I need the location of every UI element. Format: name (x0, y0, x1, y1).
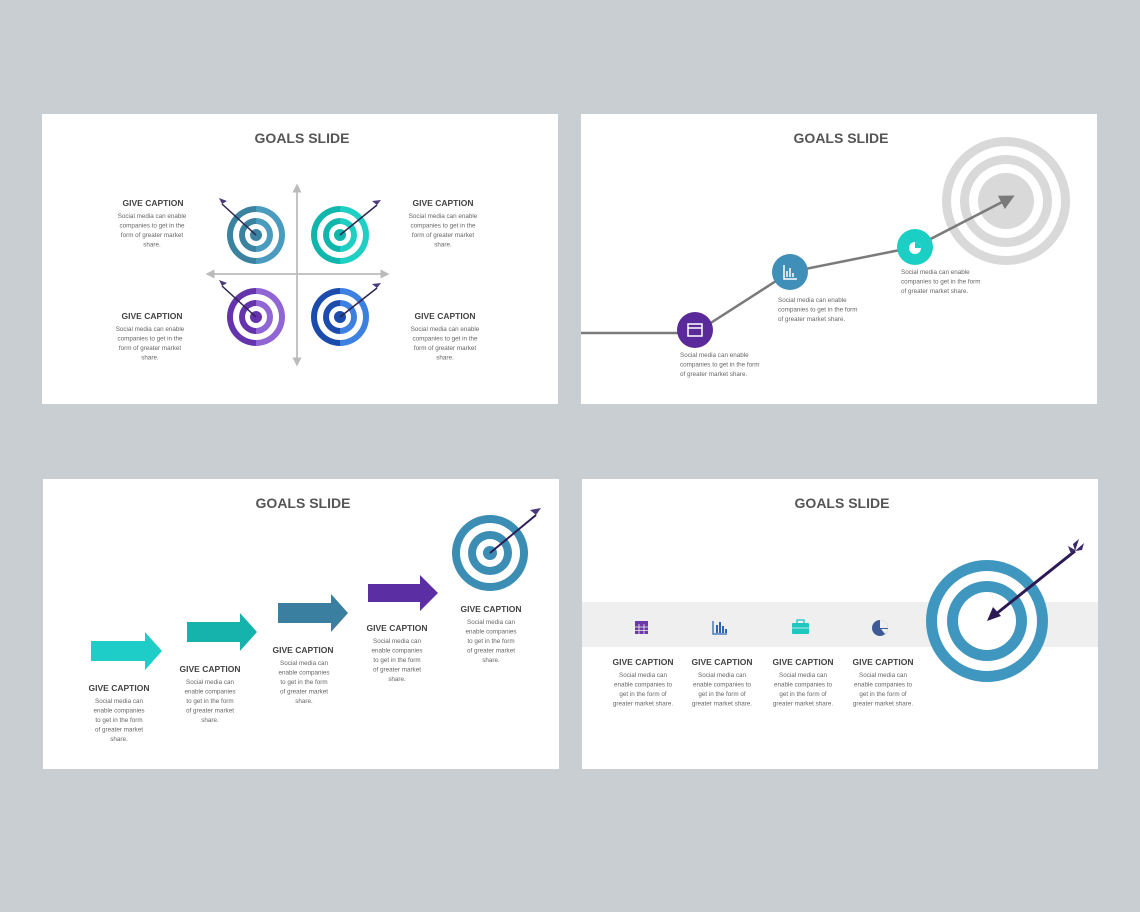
caption: top-right: companies to get in the (410, 222, 476, 230)
caption: top-left: companies to get in the (119, 222, 185, 230)
target: bottom-left (219, 280, 285, 346)
caption 2: to get in the form (186, 698, 234, 705)
icon: calendar circle (677, 312, 713, 348)
text: step 2: of greater market share. (778, 316, 845, 323)
caption 3: enable companies (278, 670, 330, 676)
caption 1: greater market share. (613, 700, 673, 708)
icon: pie circle (897, 229, 933, 265)
caption: top-left: Social media can enable (118, 213, 187, 220)
caption: bottom-left (116, 311, 185, 362)
caption: top-left: GIVE CAPTION (123, 198, 183, 208)
caption: top-right: form of greater market (412, 232, 474, 239)
arrow 3 (278, 594, 348, 632)
caption: bottom-right: companies to get in the (412, 336, 478, 342)
caption: bottom-left: GIVE CAPTION (122, 311, 182, 321)
caption 2: GIVE CAPTION (692, 657, 752, 667)
caption 2: enable companies (184, 688, 236, 696)
target: top-left (219, 198, 285, 264)
caption 1: Social media can (619, 672, 667, 679)
gray band (582, 602, 1098, 647)
caption 1 (89, 683, 149, 743)
caption 1 (613, 657, 673, 708)
caption 4: greater market share. (853, 700, 913, 708)
panel: slide 4 band with target (582, 479, 1098, 769)
caption: top-right: share. (434, 242, 452, 248)
arrow 2 (187, 613, 257, 651)
panel: slide 1 quadrant targets (42, 114, 558, 404)
caption 3: greater market share. (773, 700, 833, 708)
icon: pie chart (872, 620, 888, 636)
caption 1: of greater market (95, 726, 143, 734)
title: GOALS SLIDE (795, 495, 889, 511)
caption 3: enable companies to (774, 682, 833, 688)
title: GOALS SLIDE (255, 130, 349, 146)
caption 1: share. (110, 736, 128, 743)
caption 5: share. (482, 657, 500, 664)
title: GOALS SLIDE (794, 130, 888, 146)
caption: bottom-right (411, 311, 480, 362)
caption: top-right: Social media can enable (409, 213, 478, 220)
text: step 1: of greater market share. (680, 371, 747, 378)
caption 3: share. (295, 698, 313, 705)
text: step 1: companies to get in the form (680, 362, 759, 368)
caption: bottom-left: Social media can enable (116, 326, 185, 333)
caption 1: GIVE CAPTION (89, 683, 149, 693)
big target (926, 539, 1084, 682)
caption 2: of greater market (186, 708, 234, 714)
panel: slide 3 arrow steps (43, 479, 559, 769)
text: step 3 (901, 269, 980, 295)
caption 1: get in the form of (619, 691, 667, 698)
text: step 3: of greater market share. (901, 288, 968, 295)
caption: top-left: share. (143, 242, 161, 248)
big gray target (942, 137, 1070, 265)
panel: slide 2 growth line (581, 114, 1097, 404)
arrow 1 (91, 632, 162, 670)
icon: calendar (635, 621, 648, 634)
caption 5: of greater market (467, 648, 515, 654)
caption: top-right (409, 198, 478, 248)
caption 2 (692, 657, 752, 708)
caption 4: Social media can (373, 638, 421, 645)
caption 4: share. (388, 676, 406, 683)
caption 3: Social media can (280, 660, 328, 667)
caption: top-left: form of greater market (121, 232, 183, 239)
text: step 2: companies to get in the form (778, 306, 857, 314)
target: bottom-right (311, 283, 381, 346)
text: step 2 (778, 297, 857, 323)
caption: bottom-left: share. (141, 354, 159, 362)
text: step 1 (680, 352, 759, 378)
text: step 3: Social media can enable (901, 269, 970, 276)
icon: briefcase (792, 620, 809, 634)
caption 4: get in the form of (859, 691, 907, 698)
caption 3: get in the form of (779, 691, 827, 698)
caption: bottom-right: share. (436, 354, 454, 362)
caption 1: enable companies (93, 708, 145, 714)
caption 3 (773, 657, 833, 708)
caption 3: GIVE CAPTION (773, 657, 833, 667)
caption 2: get in the form of (698, 691, 746, 698)
caption 5 (461, 604, 521, 664)
caption 4 (367, 623, 427, 683)
caption: bottom-left: form of greater market (119, 345, 181, 352)
icon: bar chart (713, 621, 727, 634)
caption 1: Social media can (95, 698, 143, 705)
caption 2: Social media can (186, 679, 234, 686)
caption 4: GIVE CAPTION (853, 657, 913, 667)
caption 3 (273, 645, 333, 705)
arrow 4 (368, 575, 438, 611)
caption 3: of greater market (280, 688, 328, 696)
growth line arrow (581, 199, 1008, 333)
icon: bar chart circle (772, 254, 808, 290)
caption: bottom-right: form of greater market (414, 345, 476, 352)
caption 5: Social media can (467, 619, 515, 626)
caption 5: enable companies (465, 628, 517, 636)
caption 2: Social media can (698, 672, 746, 679)
caption 4: of greater market (373, 666, 421, 674)
caption: bottom-left: companies to get in the (117, 336, 183, 342)
caption 2: enable companies to (693, 682, 752, 688)
text: step 2: Social media can enable (778, 297, 847, 304)
caption 4: GIVE CAPTION (367, 623, 427, 633)
target (452, 508, 541, 591)
caption 4: enable companies to (854, 682, 913, 688)
caption: top-left (118, 198, 187, 248)
caption: top-right: GIVE CAPTION (413, 198, 473, 208)
caption 4: to get in the form (373, 657, 421, 664)
caption 4 (853, 657, 913, 708)
caption 2 (180, 664, 240, 724)
caption: bottom-right: GIVE CAPTION (415, 311, 475, 321)
caption: bottom-right: Social media can enable (411, 326, 480, 333)
caption 5: to get in the form (467, 638, 515, 645)
caption 3: Social media can (779, 672, 827, 679)
caption 2: share. (201, 717, 219, 724)
caption 4: Social media can (859, 672, 907, 679)
caption 1: enable companies to (614, 682, 673, 688)
caption 1: to get in the form (95, 717, 143, 724)
text: step 1: Social media can enable (680, 352, 749, 359)
caption 2: greater market share. (692, 700, 752, 708)
caption 1: GIVE CAPTION (613, 657, 673, 667)
caption 3: GIVE CAPTION (273, 645, 333, 655)
caption 2: GIVE CAPTION (180, 664, 240, 674)
text: step 3: companies to get in the form (901, 278, 980, 286)
axes (210, 188, 385, 362)
caption 3: to get in the form (280, 679, 328, 686)
target: top-right (311, 200, 381, 264)
caption 5: GIVE CAPTION (461, 604, 521, 614)
caption 4: enable companies (371, 648, 423, 654)
title: GOALS SLIDE (256, 495, 350, 511)
